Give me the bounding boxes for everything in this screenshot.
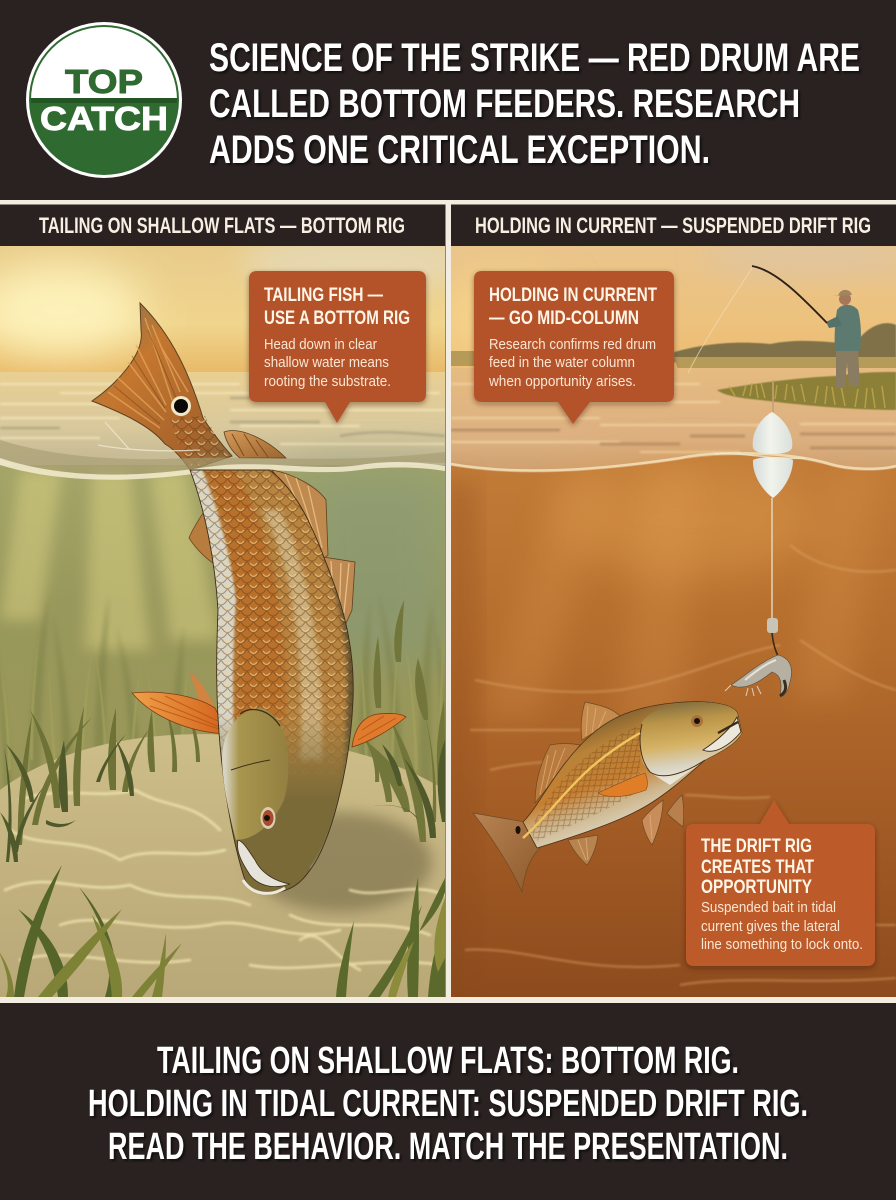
grass island <box>717 372 896 410</box>
body <box>523 702 742 848</box>
legs <box>836 350 860 388</box>
scale texture <box>190 470 352 758</box>
seagrass blades right <box>359 600 447 842</box>
callout: tailing fish: TAILING FISH — <box>264 285 383 306</box>
callout: tailing fish: shallow water means <box>264 354 389 371</box>
tail rays <box>108 318 188 428</box>
gill plate <box>222 708 288 840</box>
callout: the drift rig: Suspended bait in tidal <box>701 900 836 916</box>
pectoral <box>598 773 647 797</box>
callout: tailing fish: Head down in clear <box>264 336 377 353</box>
callout: holding in current: feed in the water column <box>489 354 635 371</box>
left column heading <box>0 205 446 245</box>
head and cap <box>839 293 851 305</box>
eye <box>691 715 703 727</box>
callout: the drift rig: current gives the lateral <box>701 919 840 935</box>
orange flank <box>205 470 286 720</box>
soft dorsal <box>272 470 328 560</box>
current streaks <box>465 545 896 985</box>
underwater <box>0 465 450 810</box>
side fin <box>188 512 213 564</box>
left column heading: TAILING ON SHALLOW FLATS — BOTTOM RIG <box>39 213 405 238</box>
lateral line <box>523 733 640 838</box>
header band <box>20 20 860 183</box>
eye <box>260 807 276 829</box>
spiny dorsal <box>324 556 356 624</box>
lower frame line <box>0 997 896 1003</box>
angler on grass bank <box>688 266 896 410</box>
callout: tailing fish: rooting the substrate. <box>264 373 391 390</box>
callout: the drift rig: CREATES THAT <box>701 857 814 878</box>
footer summary <box>0 1003 896 1200</box>
fine mid seagrass <box>4 660 443 770</box>
pale lateral band <box>262 510 322 760</box>
waterline <box>0 440 445 480</box>
rod <box>752 266 827 323</box>
head <box>640 702 742 785</box>
left pectoral fin <box>132 692 228 734</box>
foreground seagrass <box>0 865 445 997</box>
fin rays <box>540 706 652 860</box>
tail <box>473 813 540 892</box>
callout: holding in current: Research confirms red drum <box>489 336 656 353</box>
callout: holding in current: — GO MID-COLUMN <box>489 308 639 329</box>
white frame lines <box>0 200 896 204</box>
center white divider <box>446 204 451 999</box>
back seagrass <box>0 608 445 786</box>
underwater <box>445 455 896 1000</box>
marsh bank <box>451 351 896 376</box>
tail scales <box>170 416 228 468</box>
redfish body <box>189 470 354 895</box>
redfish striking <box>473 702 742 892</box>
shrimp bait <box>725 655 792 696</box>
panel: tailing scene <box>0 232 480 997</box>
mouth <box>703 717 741 751</box>
sand caustics <box>5 790 445 970</box>
callout: tailing fish <box>249 271 426 423</box>
headline: ADDS ONE CRITICAL EXCEPTION. <box>209 128 710 172</box>
sky <box>451 246 896 368</box>
fishing line <box>688 268 752 373</box>
head right edge sheen <box>312 760 350 870</box>
sand floor <box>0 734 445 997</box>
underwater rays <box>480 470 880 760</box>
right pectoral fin <box>352 713 406 747</box>
callout: holding in current: HOLDING IN CURRENT <box>489 285 657 306</box>
distant treeline <box>674 323 896 362</box>
panel: drift rig scene <box>430 240 896 1000</box>
logo badge: Top Catch: CATCH <box>40 100 168 137</box>
right column heading <box>451 205 896 245</box>
dark back <box>318 546 353 776</box>
head tone <box>219 720 348 892</box>
dorsal fin near surface <box>224 431 286 458</box>
waterline <box>451 453 896 471</box>
callout: the drift rig: THE DRIFT RIG <box>701 836 812 857</box>
callout: the drift rig: OPPORTUNITY <box>701 877 812 898</box>
sky <box>0 246 445 372</box>
callout: tailing fish: USE A BOTTOM RIG <box>264 308 410 329</box>
silver belly <box>190 470 238 760</box>
callout: holding in current <box>474 271 674 424</box>
drift float and leader <box>715 380 805 656</box>
logo badge: Top Catch <box>26 22 182 178</box>
logo badge: Top Catch: TOP <box>65 63 143 100</box>
redfish: fins behind body <box>132 470 406 747</box>
fins <box>535 702 684 865</box>
small pectoral <box>190 672 215 708</box>
sea surface beyond <box>0 372 445 465</box>
light rays <box>0 470 220 650</box>
headline <box>209 36 860 172</box>
jacket <box>835 305 861 351</box>
mouth <box>238 840 290 887</box>
callout: holding in current: when opportunity arises. <box>488 373 636 390</box>
splash <box>98 422 200 451</box>
callout: the drift rig <box>686 800 875 966</box>
seagrass blades left <box>0 702 200 862</box>
water surface beyond <box>451 368 896 488</box>
callout: the drift rig: line something to lock onto. <box>701 937 863 953</box>
redfish tail above water <box>92 303 232 470</box>
